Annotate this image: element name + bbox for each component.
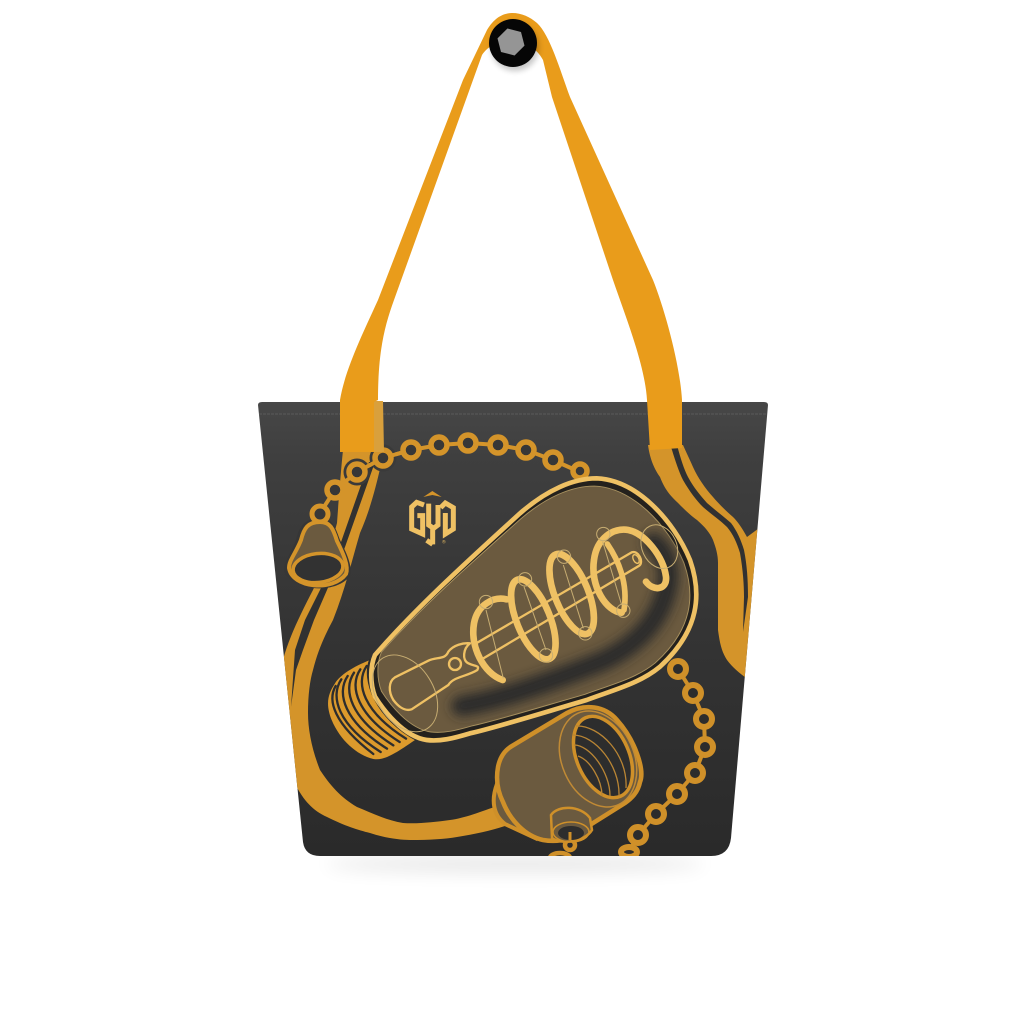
top bead chain: [320, 435, 587, 513]
socket flange: [494, 784, 535, 838]
socket set screw: [551, 808, 592, 842]
bulb glass fill: [378, 486, 690, 732]
bulb glass outline: [371, 478, 696, 740]
icon: chain bell pull: [284, 506, 351, 588]
bulb screw base: [328, 659, 417, 759]
filament spiral coil: [473, 530, 666, 680]
panel: bag body: [258, 402, 768, 856]
icon: brand logo: [412, 491, 453, 546]
filament stem and neck: [390, 552, 641, 710]
icon: wall peg: [489, 19, 539, 71]
strap handle: [340, 13, 682, 452]
tote bag illustration: [258, 13, 768, 876]
socket rim: [545, 699, 651, 819]
strap tab behind front strap: [374, 401, 384, 452]
ground shadow: [325, 856, 705, 872]
left power cord: [283, 450, 505, 840]
bottom short chain: [548, 842, 578, 856]
lamp socket: [494, 699, 651, 842]
filament thin detail rings: [359, 519, 685, 744]
artwork clipped to bag: [283, 435, 790, 863]
logo registered mark: ®: [442, 539, 446, 546]
right bead chain: [621, 661, 713, 857]
socket opening with threads: [562, 707, 644, 807]
light bulb: [328, 478, 696, 759]
right power cord: [648, 445, 758, 677]
socket body: [497, 707, 641, 841]
bulb inner shadow: [462, 543, 668, 706]
